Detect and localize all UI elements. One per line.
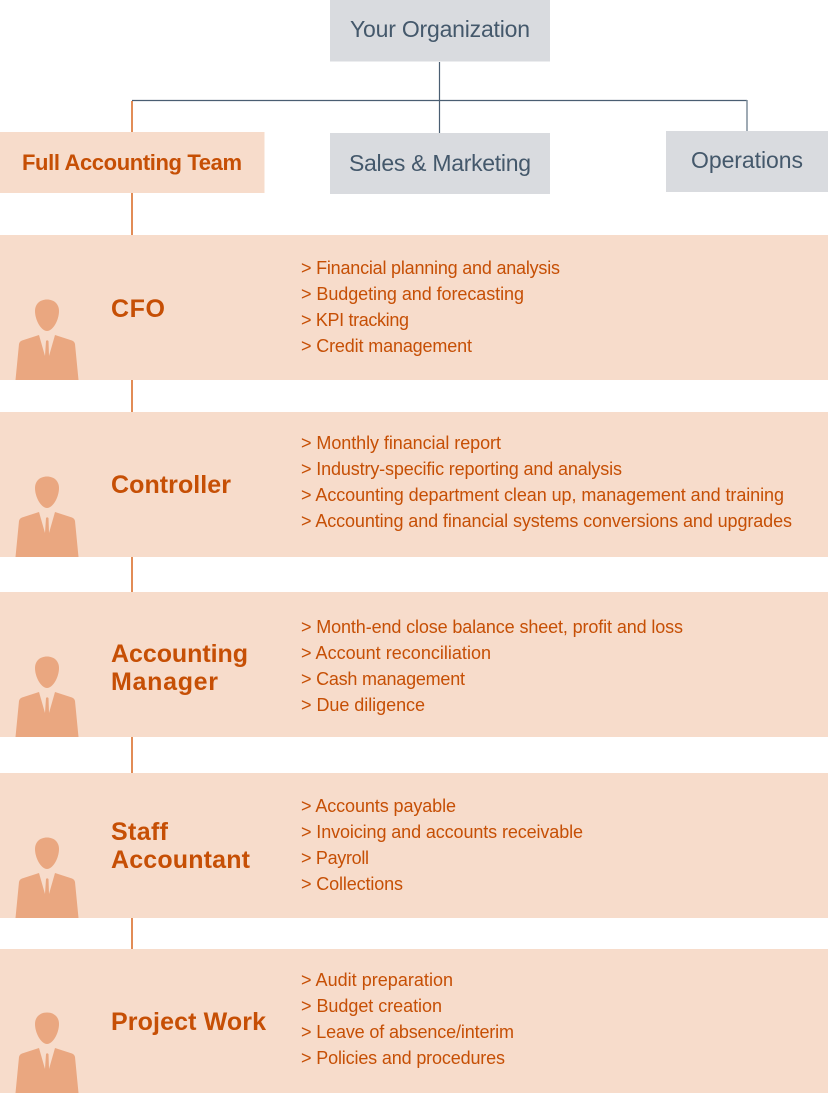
box: Your Organization: Your Organization xyxy=(350,16,530,42)
connector: organization to departments xyxy=(132,62,747,133)
role title: Accounting Manager: Accounting xyxy=(111,640,248,668)
box: Sales & Marketing xyxy=(330,133,550,194)
responsibilities list: > Payroll xyxy=(301,848,369,868)
responsibilities list: > Cash management xyxy=(301,669,465,689)
box: Operations: Operations xyxy=(691,147,803,173)
responsibilities list: > Audit preparation xyxy=(301,970,453,990)
responsibilities list xyxy=(301,433,792,531)
responsibilities list: > Policies and procedures xyxy=(301,1048,505,1068)
responsibilities list xyxy=(301,258,560,356)
panel: Accounting Manager xyxy=(0,592,828,737)
role title: Project Work: Project Work xyxy=(111,1008,266,1036)
responsibilities list: > Monthly financial report xyxy=(301,433,501,453)
responsibilities list: > Accounting department clean up, management and training xyxy=(301,485,784,505)
responsibilities list: > Budgeting and forecasting xyxy=(301,284,524,304)
box: Operations xyxy=(666,131,828,192)
responsibilities list: > Industry-specific reporting and analysis xyxy=(301,459,622,479)
box: Full Accounting Team: Full Accounting Team xyxy=(22,150,242,175)
box: Sales & Marketing: Sales & Marketing xyxy=(349,150,531,176)
connector: accounting team chain xyxy=(131,193,133,949)
icon: person xyxy=(16,1012,78,1093)
responsibilities list: > Budget creation xyxy=(301,996,442,1016)
icon: person xyxy=(16,656,78,737)
responsibilities list: > Invoicing and accounts receivable xyxy=(301,822,583,842)
responsibilities list: > Leave of absence/interim xyxy=(301,1022,514,1042)
box: Full Accounting Team xyxy=(0,132,264,193)
role title: Staff Accountant xyxy=(111,818,251,874)
responsibilities list: > Month-end close balance sheet, profit and loss xyxy=(301,617,683,637)
role title: Accounting Manager xyxy=(111,640,248,696)
icon: person xyxy=(16,300,78,380)
responsibilities list: > Collections xyxy=(301,874,403,894)
responsibilities list: > Account reconciliation xyxy=(301,643,491,663)
responsibilities list: > Due diligence xyxy=(301,695,425,715)
icon: person xyxy=(16,476,78,557)
role title: Controller: Controller xyxy=(111,471,231,499)
role title: Staff Accountant: Accountant xyxy=(111,846,251,874)
box: Your Organization xyxy=(330,0,550,62)
panel: Controller xyxy=(0,412,828,557)
responsibilities list xyxy=(301,617,683,715)
responsibilities list xyxy=(301,970,514,1068)
responsibilities list xyxy=(301,796,583,894)
responsibilities list: > Credit management xyxy=(301,336,472,356)
role title: Accounting Manager: Manager xyxy=(111,668,218,696)
responsibilities list: > KPI tracking xyxy=(301,310,409,330)
panel: Project Work xyxy=(0,949,828,1093)
role title: Staff Accountant: Staff xyxy=(111,818,169,846)
responsibilities list: > Financial planning and analysis xyxy=(301,258,560,278)
icon: person xyxy=(16,838,78,918)
responsibilities list: > Accounts payable xyxy=(301,796,456,816)
role title: CFO: CFO xyxy=(111,295,165,323)
responsibilities list: > Accounting and financial systems conversions and upgrades xyxy=(301,511,792,531)
panel: Staff Accountant xyxy=(0,773,828,918)
panel: CFO xyxy=(0,235,828,380)
